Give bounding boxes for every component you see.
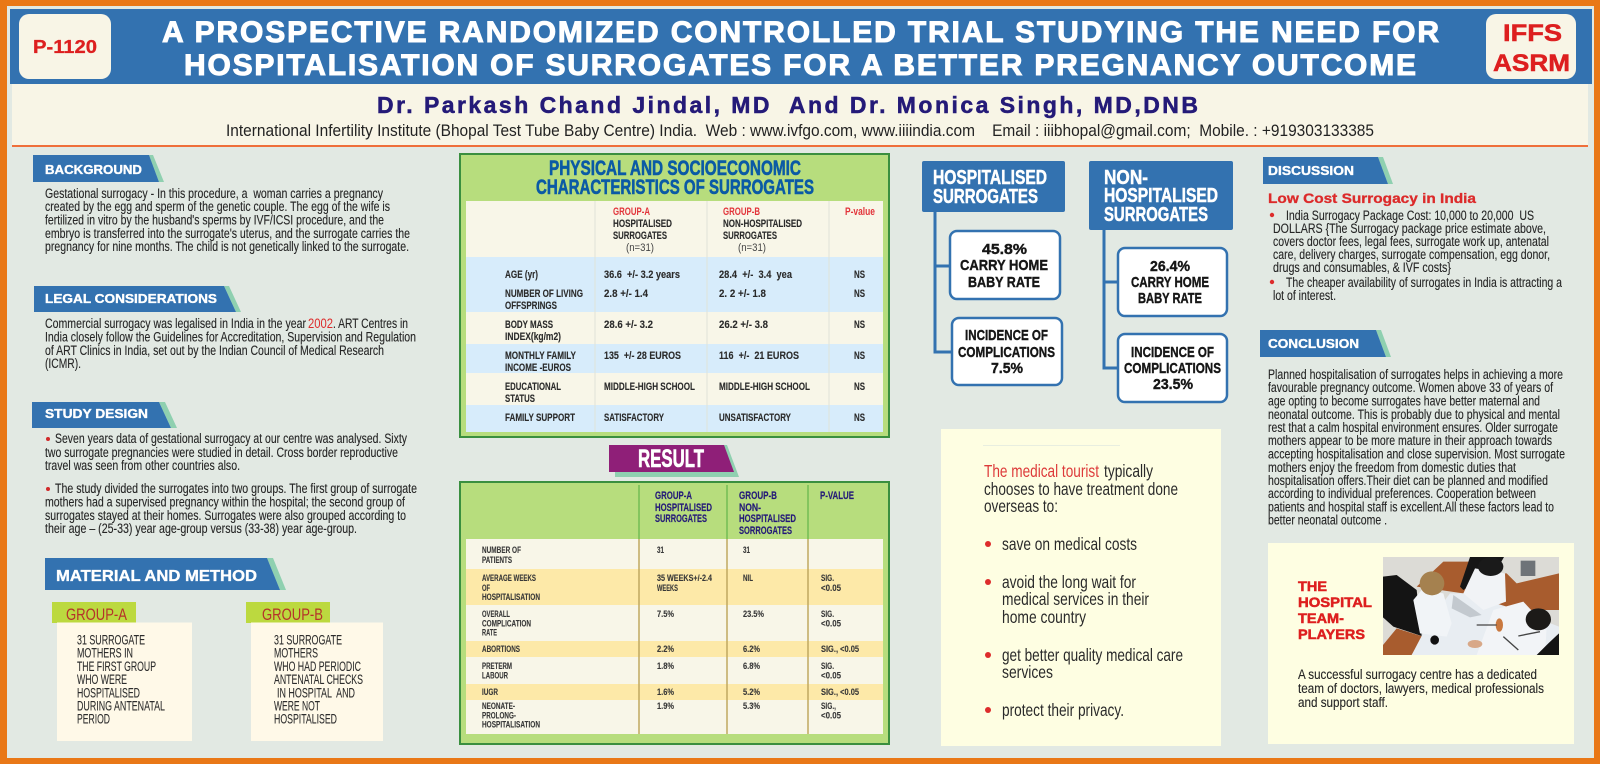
results rows: PROLONG- <box>482 710 516 720</box>
diagram: hospitalised surrogates <box>922 161 1065 385</box>
text: study design: surrogates stayed at their homes. Surrogates were also grouped according to <box>45 508 406 523</box>
group B card: IN HOSPITAL AND <box>277 685 355 700</box>
diagram: non-hospitalised surrogates <box>1089 161 1233 402</box>
group B card: ANTENATAL CHECKS <box>274 672 363 687</box>
table rows: NS <box>854 269 865 281</box>
heading: conclusion: CONCLUSION <box>1268 336 1359 351</box>
author band <box>12 84 1588 147</box>
heading: conclusion <box>1260 330 1391 357</box>
results rows: NIL <box>743 573 753 583</box>
results column headers: SURROGATES <box>655 513 707 525</box>
text: legal considerations: 2002 <box>308 316 333 331</box>
medical tourist intro: The medical tourist <box>984 461 1099 481</box>
table column headers: SURROGATES <box>723 230 777 242</box>
carry home baby rate 26.4%: 26.4% <box>1150 258 1190 275</box>
group B card <box>246 602 383 741</box>
table panel: characteristics of surrogates <box>460 154 889 437</box>
carry home baby rate 26.4%: CARRY HOME <box>1131 274 1209 291</box>
table rows: 135 +/- 28 EUROS <box>604 350 681 362</box>
table rows: OFFSPRINGS <box>505 300 557 312</box>
non-hospitalised header: NON- <box>1104 167 1148 189</box>
text: conclusion <box>1268 367 1565 528</box>
heading: result: RESULT <box>638 445 704 473</box>
results column headers <box>655 490 854 537</box>
heading: legal considerations <box>34 286 241 312</box>
complications 7.5%: COMPLICATIONS <box>958 344 1055 361</box>
table column headers: SURROGATES <box>613 230 667 242</box>
team description: and support staff. <box>1298 695 1388 710</box>
table title <box>536 157 814 199</box>
results rows: 35 WEEKS+/-2.4 <box>657 573 712 583</box>
heading: material and method <box>45 558 286 590</box>
table column headers: GROUP-B <box>723 206 760 218</box>
complications 23.5%: 23.5% <box>1153 376 1193 393</box>
text: study design: travel was seen from other countries also. <box>45 458 240 473</box>
text: discussion <box>1268 190 1562 303</box>
results column headers: HOSPITALISED <box>655 502 712 514</box>
society badge: IFFS <box>1503 20 1562 47</box>
text: legal considerations: . ART Centres in <box>333 316 408 331</box>
carry home baby rate 45.8%: 45.8% <box>982 241 1027 258</box>
text: conclusion: mothers enjoy the freedom from domestic duties that <box>1268 460 1516 475</box>
table panel: results <box>460 482 889 744</box>
results rows: PATIENTS <box>482 555 512 565</box>
table rows: INDEX(kg/m2) <box>505 331 561 343</box>
results rows: OF <box>482 583 490 593</box>
poster number badge <box>19 14 111 79</box>
text: legal considerations <box>45 316 416 371</box>
table rows: MONTHLY FAMILY <box>505 350 576 362</box>
text: background: embryo is transferred into the surrogate's uterus, and the surrogate carries the <box>45 226 410 241</box>
results rows: <0.05 <box>821 710 841 720</box>
society badge: ASRM <box>1493 50 1570 77</box>
text: background: pregnancy for nine months. The child is not genetically linked to the surrogate. <box>45 239 409 254</box>
results rows: WEEKS <box>657 583 678 593</box>
group A card: 31 SURROGATE <box>77 632 145 648</box>
hospitalised header: HOSPITALISED <box>933 167 1047 189</box>
medical tourist bullets <box>985 534 1183 720</box>
complications 23.5%: INCIDENCE OF <box>1131 344 1214 361</box>
medical tourist bullets: medical services in their <box>1002 589 1149 609</box>
text: discussion: India Surrogacy Package Cost: 10,000 to 20,000 US <box>1286 208 1534 223</box>
table rows: NS <box>854 319 865 331</box>
results rows: SIG. <box>821 609 834 619</box>
table title: CHARACTERISTICS OF SURROGATES <box>536 176 814 199</box>
text: legal considerations: India closely follow the Guidelines for Accreditation, Supervision and Regulation <box>45 330 416 344</box>
results rows: SIG. <box>821 573 834 583</box>
carry home baby rate 26.4%: BABY RATE <box>1138 290 1202 307</box>
medical tourist intro <box>984 461 1178 516</box>
medical tourist bullets: home country <box>1002 607 1086 627</box>
table title: PHYSICAL AND SOCIOECONOMIC <box>549 157 801 180</box>
carry home baby rate 45.8%: BABY RATE <box>968 274 1040 291</box>
results column headers: NON- <box>739 502 761 514</box>
group B card: MOTHERS <box>274 646 318 661</box>
group B card: WERE NOT <box>274 698 320 714</box>
results rows: HOSPITALISATION <box>482 592 540 602</box>
table column headers: NON-HOSPITALISED <box>723 218 802 230</box>
table rows: 36.6 +/- 3.2 years <box>604 269 680 281</box>
results rows: 6.2% <box>743 644 760 654</box>
table column headers: (n=31) <box>738 242 766 254</box>
results column headers: P-VALUE <box>820 490 854 502</box>
heading: study design <box>32 402 177 428</box>
results rows: 5.3% <box>743 701 760 711</box>
results rows: RATE <box>482 628 497 638</box>
results rows: OVERALL <box>482 609 510 619</box>
text: discussion: lot of interest. <box>1273 288 1336 303</box>
results rows: 23.5% <box>743 609 764 619</box>
panel: hospital team players <box>1268 543 1574 744</box>
results rows: 7.5% <box>657 609 674 619</box>
team description: team of doctors, lawyers, medical professionals <box>1298 681 1544 696</box>
table column headers: P-value <box>845 206 875 218</box>
table rows: BODY MASS <box>505 319 553 331</box>
table rows: NS <box>854 288 865 300</box>
results rows: COMPLICATION <box>482 618 531 628</box>
text: study design: mothers had a supervised pregnancy within the hospital; the second group of <box>45 494 405 510</box>
header banner <box>10 9 1592 84</box>
results rows: 31 <box>657 545 664 555</box>
title: HOSPITALISATION OF SURROGATES FOR A BETTER PREGNANCY OUTCOME <box>184 49 1416 82</box>
results rows: 5.2% <box>743 687 760 697</box>
group A card <box>52 602 192 741</box>
text: background: Gestational surrogacy - In this procedure, a woman carries a pregnancy <box>45 186 383 201</box>
group B card: HOSPITALISED <box>274 712 337 727</box>
title <box>162 16 1439 82</box>
table column headers: (n=31) <box>626 242 654 254</box>
team heading: THE <box>1298 578 1327 594</box>
text: background: fertilized in vitro by the husband's sperms by IVF/ICSI procedure, and the <box>45 212 384 228</box>
medical tourist intro: typically <box>1104 461 1153 481</box>
table rows: 2.8 +/- 1.4 <box>604 288 649 300</box>
results rows: NUMBER OF <box>482 545 521 555</box>
poster number badge: P-1120 <box>33 37 97 57</box>
group A card: HOSPITALISED <box>77 685 140 700</box>
medical tourist bullets: services <box>1002 662 1053 682</box>
results rows: 2.2% <box>657 644 674 654</box>
medical tourist bullets: avoid the long wait for <box>1002 572 1136 592</box>
heading: legal considerations: LEGAL CONSIDERATIONS <box>45 291 217 306</box>
group B card: 31 SURROGATE <box>274 632 342 648</box>
heading: result <box>609 445 739 477</box>
heading: background: BACKGROUND <box>45 162 142 177</box>
results rows: NEONATE- <box>482 701 515 711</box>
medical tourist bullets: get better quality medical care <box>1002 645 1183 665</box>
carry home baby rate 45.8% <box>950 231 1060 299</box>
table rows: EDUCATIONAL <box>505 381 561 393</box>
results rows: HOSPITALISATION <box>482 720 540 730</box>
carry home baby rate 26.4% <box>1118 248 1227 316</box>
table rows: STATUS <box>505 393 535 405</box>
group A card: DURING ANTENATAL <box>77 698 165 714</box>
heading: material and method: MATERIAL AND METHOD <box>56 568 257 585</box>
medical tourist bullets: protect their privacy. <box>1002 700 1124 720</box>
table rows: NUMBER OF LIVING <box>505 288 583 300</box>
results rows: ABORTIONS <box>482 644 520 654</box>
results rows: IUGR <box>482 687 498 697</box>
table column headers: HOSPITALISED <box>613 218 672 230</box>
results rows: SIG., <0.05 <box>821 644 859 654</box>
complications 7.5%: 7.5% <box>991 360 1023 377</box>
medical tourist bullets: save on medical costs <box>1002 534 1137 554</box>
results rows: <0.05 <box>821 670 841 680</box>
table rows: 2. 2 +/- 1.8 <box>719 288 766 300</box>
results column headers: SORROGATES <box>739 525 792 537</box>
table rows: FAMILY SUPPORT <box>505 412 575 424</box>
team heading: TEAM- <box>1298 610 1344 626</box>
heading: background <box>33 155 164 182</box>
non-hospitalised header: SURROGATES <box>1104 204 1208 226</box>
heading: discussion: DISCUSSION <box>1268 163 1354 178</box>
table rows: INCOME -EUROS <box>505 362 571 374</box>
results rows: <0.05 <box>821 583 841 593</box>
text: study design <box>45 431 417 536</box>
society badge <box>1486 14 1576 79</box>
table column headers <box>613 206 875 254</box>
results rows: 1.8% <box>657 661 674 671</box>
results rows: PRETERM <box>482 661 512 671</box>
text: legal considerations: Commercial surrogacy was legalised in India in the year <box>45 316 306 331</box>
table rows: SATISFACTORY <box>604 412 664 424</box>
team heading: HOSPITAL <box>1298 594 1372 610</box>
results rows: 1.9% <box>657 701 674 711</box>
group A card: GROUP-A <box>66 605 128 624</box>
panel: medical tourist <box>941 429 1221 746</box>
heading: study design: STUDY DESIGN <box>45 406 148 421</box>
complications 7.5%: INCIDENCE OF <box>965 327 1048 344</box>
group A card: WHO WERE <box>77 672 127 687</box>
results rows: SIG., <0.05 <box>821 687 859 697</box>
table rows: 28.4 +/- 3.4 yea <box>719 269 793 281</box>
text: background: created by the egg and sperm of the genetic couple. The egg of the wife is <box>45 199 390 214</box>
text: study design: their age – (25-33) year age-group versus (33-38) year age-group. <box>45 521 357 536</box>
authors: Dr. Parkash Chand Jindal, MD And Dr. Monica Singh, MD,DNB <box>377 92 1198 118</box>
title: A PROSPECTIVE RANDOMIZED CONTROLLED TRIAL STUDYING THE NEED FOR <box>162 16 1439 49</box>
table rows: 116 +/- 21 EUROS <box>719 350 799 362</box>
results rows: 6.8% <box>743 661 760 671</box>
results rows: <0.05 <box>821 618 841 628</box>
results rows: AVERAGE WEEKS <box>482 573 536 583</box>
group A card: MOTHERS IN <box>77 646 133 661</box>
illustration: doctors meeting around a table <box>1383 557 1559 655</box>
table rows: MIDDLE-HIGH SCHOOL <box>604 381 695 393</box>
text: background <box>45 186 410 254</box>
complications 23.5% <box>1118 334 1227 402</box>
medical tourist intro: overseas to: <box>984 496 1058 516</box>
results column headers: GROUP-B <box>739 490 777 502</box>
text: legal considerations: of ART Clinics in India, set out by the Indian Council of Medical Research <box>45 343 384 358</box>
text: study design: two surrogate pregnancies were studied in detail. Cross border reproductive <box>45 445 398 460</box>
carry home baby rate 45.8%: CARRY HOME <box>960 257 1048 274</box>
results rows: 31 <box>743 545 750 555</box>
table rows: UNSATISFACTORY <box>719 412 791 424</box>
results column headers: GROUP-A <box>655 490 692 502</box>
table rows <box>505 269 865 424</box>
complications 23.5%: COMPLICATIONS <box>1124 360 1221 377</box>
group B card: WHO HAD PERIODIC <box>274 659 361 674</box>
results column headers: HOSPITALISED <box>739 513 796 525</box>
group A card: THE FIRST GROUP <box>77 659 156 674</box>
results rows: 1.6% <box>657 687 674 697</box>
table rows: NS <box>854 412 865 424</box>
hospitalised header: SURROGATES <box>933 186 1038 208</box>
complications 7.5% <box>952 318 1062 385</box>
text: study design: The study divided the surrogates into two groups. The first group of surrogate <box>55 481 417 496</box>
results rows: LABOUR <box>482 670 508 680</box>
group A card: PERIOD <box>77 712 110 727</box>
table rows: MIDDLE-HIGH SCHOOL <box>719 381 810 393</box>
table rows: NS <box>854 350 865 362</box>
non-hospitalised header: HOSPITALISED <box>1104 185 1218 207</box>
team description: A successful surrogacy centre has a dedicated <box>1298 667 1537 682</box>
table rows: NS <box>854 381 865 393</box>
text: conclusion: better neonatal outcome . <box>1268 512 1387 528</box>
table rows: 28.6 +/- 3.2 <box>604 319 653 331</box>
team heading: PLAYERS <box>1298 626 1365 642</box>
hospitalised header <box>922 161 1065 212</box>
results rows <box>482 545 859 730</box>
medical tourist intro: chooses to have treatment done <box>984 479 1178 499</box>
table rows: AGE (yr) <box>505 269 538 281</box>
text: study design: Seven years data of gestational surrogacy at our centre was analysed. Sixty <box>55 431 407 446</box>
team description <box>1298 667 1544 710</box>
results rows: SIG., <box>821 701 836 711</box>
text: discussion: Low Cost Surrogacy in India <box>1268 190 1476 206</box>
group B card: GROUP-B <box>262 605 323 624</box>
text: discussion: drugs and consumables, & IVF costs} <box>1273 260 1451 275</box>
results rows: SIG. <box>821 661 834 671</box>
affiliation: International Infertility Institute (Bhopal Test Tube Baby Centre) India. Web : www.ivfgo.com, www.iiiindia.com Email : iiibhopal@gmail.com; Mobile. : +919303133385 <box>226 121 1374 140</box>
non-hospitalised header <box>1089 161 1233 230</box>
text: legal considerations: (ICMR). <box>45 356 81 371</box>
team heading <box>1298 578 1372 642</box>
heading: discussion <box>1263 157 1393 184</box>
table rows: 26.2 +/- 3.8 <box>719 319 768 331</box>
table column headers: GROUP-A <box>613 206 650 218</box>
